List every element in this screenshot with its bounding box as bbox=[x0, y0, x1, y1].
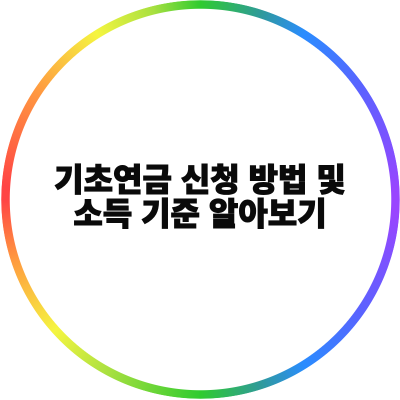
title: 기초연금 신청 방법 및 bbox=[54, 162, 346, 198]
title bbox=[54, 162, 346, 232]
title: 소득 기준 알아보기 bbox=[73, 196, 327, 232]
